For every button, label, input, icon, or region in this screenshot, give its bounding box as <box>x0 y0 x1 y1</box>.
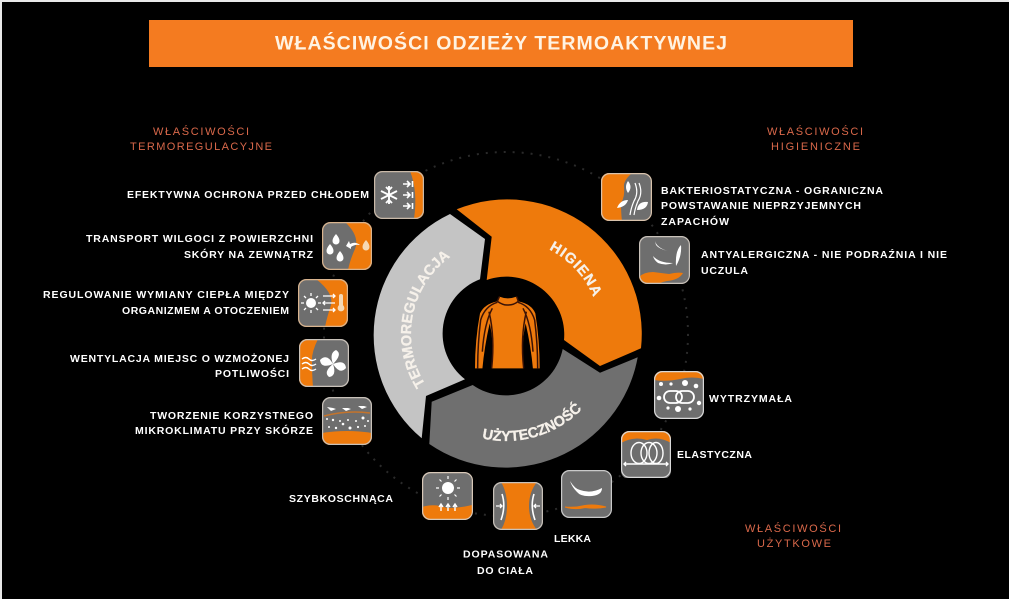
heading: właściwości higieniczne: WŁAŚCIWOŚCI <box>767 125 863 138</box>
icon: snowflake <box>374 171 424 219</box>
segment: higiena <box>456 199 642 366</box>
label: transport wilgoci <box>86 233 314 261</box>
label: dopasowana do ciała: DOPASOWANA <box>463 548 548 560</box>
label: wymiana ciepła: ORGANIZMEM A OTOCZENIEM <box>122 305 289 317</box>
label: bakteriostatyczna: BAKTERIOSTATYCZNA - OGRANICZNA <box>661 185 883 197</box>
label: wytrzymała: WYTRZYMAŁA <box>709 393 792 405</box>
label: wentylacja: POTLIWOŚCI <box>215 367 289 380</box>
segment: termoregulacja <box>374 214 485 438</box>
segment: użyteczność: UŻYTECZNOŚĆ <box>483 401 581 442</box>
label: dopasowana do ciała <box>463 548 548 577</box>
centre circle <box>447 278 563 394</box>
label: wentylacja: WENTYLACJA MIEJSC O WZMOŻONEJ <box>70 352 289 365</box>
label: mikroklimat: TWORZENIE KORZYSTNEGO <box>150 410 313 422</box>
label: bakteriostatyczna <box>661 185 883 228</box>
icon: body fit <box>493 482 543 530</box>
icon: light feather <box>561 470 611 518</box>
icon: microclimate <box>322 397 372 445</box>
label: lekka: LEKKA <box>554 533 591 545</box>
icon: leaves and scent <box>601 173 651 221</box>
cycle diagram <box>374 199 642 468</box>
icon: quick dry sun <box>422 472 472 520</box>
label: antyalergiczna <box>701 248 947 277</box>
label: transport wilgoci: SKÓRY NA ZEWNĄTRZ <box>184 248 314 261</box>
heading: właściwości użytkowe <box>745 522 841 550</box>
label: wymiana ciepła: REGULOWANIE WYMIANY CIEPŁA MIĘDZY <box>43 289 289 301</box>
segment: użyteczność <box>429 349 638 468</box>
heading: właściwości termoregulacyjne: WŁAŚCIWOŚCI <box>153 125 249 138</box>
heading: właściwości termoregulacyjne <box>130 125 272 153</box>
heading: właściwości higieniczne <box>767 125 863 153</box>
label: antyalergiczna: ANTYALERGICZNA - NIE PODRAŹNIA I NIE <box>701 248 947 261</box>
label: wymiana ciepła <box>43 289 289 317</box>
segment: higiena: HIGIENA <box>550 240 601 297</box>
heading: właściwości użytkowe: UŻYTKOWE <box>757 537 831 550</box>
title bar: WŁAŚCIWOŚCI ODZIEŻY TERMOAKTYWNEJ <box>275 30 727 54</box>
label: mikroklimat <box>135 410 313 437</box>
segment: termoregulacja: TERMOREGULACJA <box>400 252 450 390</box>
icon: thermoactive shirt <box>475 297 540 369</box>
label: elastyczna: ELASTYCZNA <box>677 449 752 461</box>
label: antyalergiczna: UCZULA <box>701 265 748 277</box>
label: dopasowana do ciała: DO CIAŁA <box>477 565 533 577</box>
icon: elastic coil <box>621 431 671 478</box>
label: mikroklimat: MIKROKLIMATU PRZY SKÓRZE <box>135 424 313 437</box>
heading: właściwości higieniczne: HIGIENICZNE <box>771 141 860 153</box>
icon: ventilation fan <box>299 339 349 387</box>
heading: właściwości termoregulacyjne: TERMOREGULACYJNE <box>130 141 272 153</box>
label: transport wilgoci: TRANSPORT WILGOCI Z POWIERZCHNI <box>86 233 313 245</box>
icon: heat exchange <box>298 279 348 327</box>
label: ochrona przed chłodem: EFEKTYWNA OCHRONA PRZED CHŁODEM <box>127 189 369 201</box>
icon: moisture transport <box>322 222 372 270</box>
title bar <box>149 20 853 67</box>
icon: feathers and hand <box>639 236 689 284</box>
label: bakteriostatyczna: ZAPACHÓW <box>661 215 729 228</box>
label: bakteriostatyczna: POWSTAWANIE NIEPRZYJEMNYCH <box>661 200 861 212</box>
label: szybkoschnąca: SZYBKOSCHNĄCA <box>289 493 393 505</box>
heading: właściwości użytkowe: WŁAŚCIWOŚCI <box>745 522 841 535</box>
icon: chain link <box>654 371 704 419</box>
label: wentylacja <box>70 352 289 380</box>
